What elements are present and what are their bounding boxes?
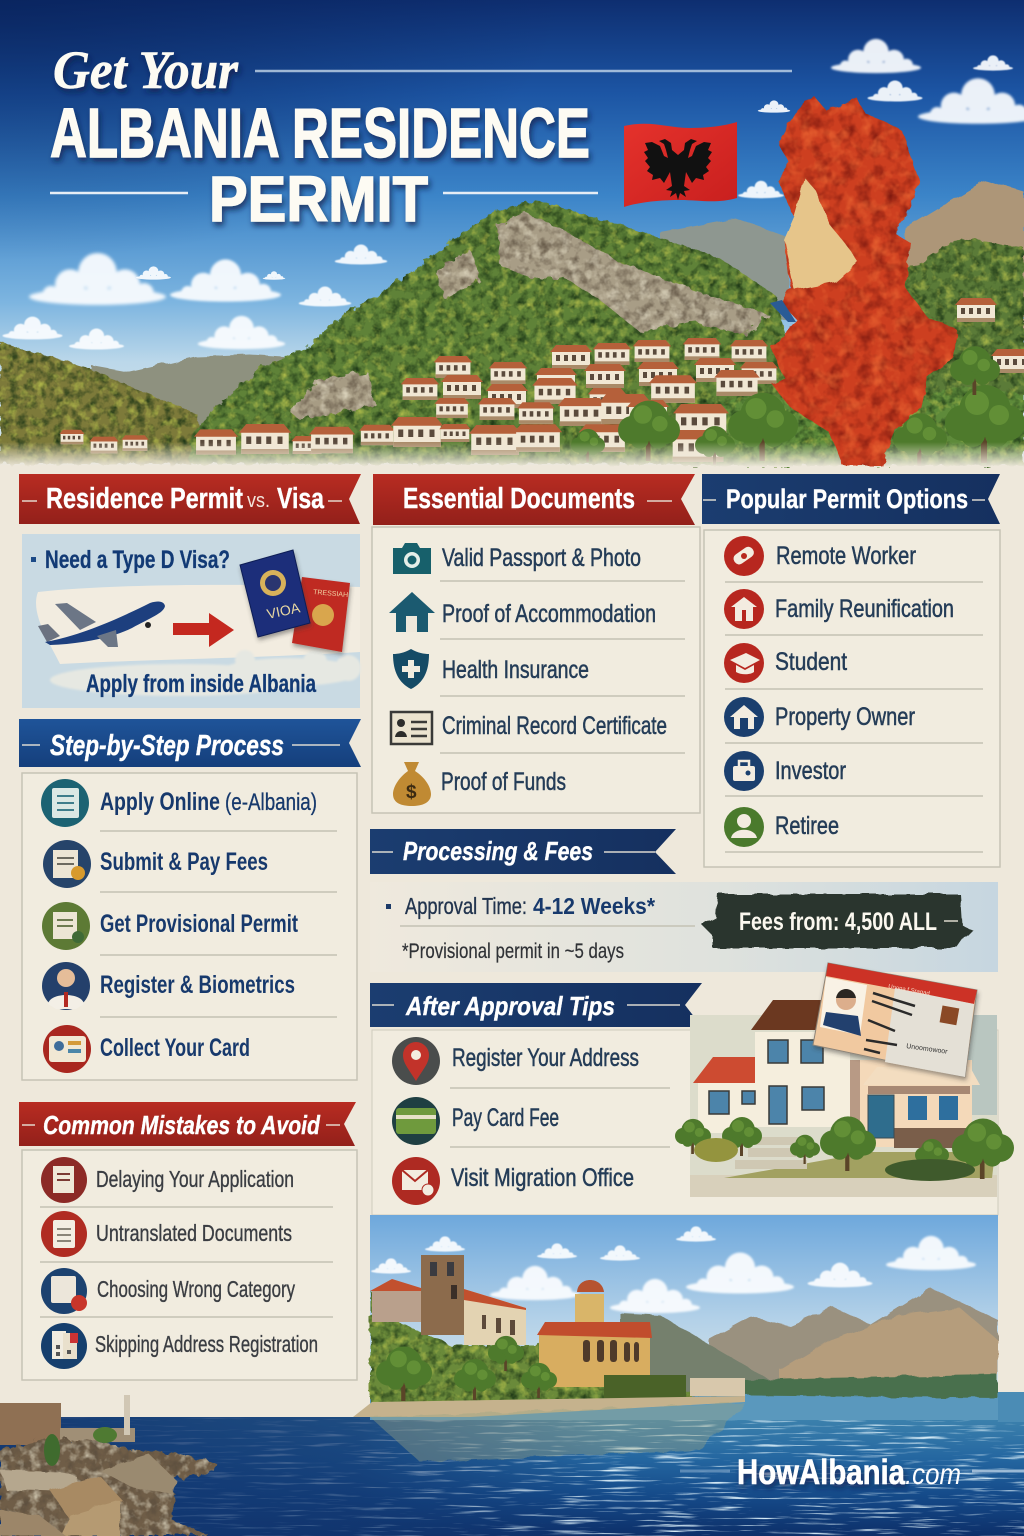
- banner: Essential Documents: Essential Documents: [403, 483, 635, 515]
- tip: migration office: Visit Migration Office: [451, 1164, 634, 1192]
- step: submit and pay: [43, 840, 268, 888]
- scenic coastal illustration: [353, 1215, 998, 1420]
- hero illustration: sky, mountains, hillside village: [0, 0, 1024, 467]
- step: register and biometrics: Register & Biometrics: [100, 971, 295, 999]
- mistake: skipping registration: [41, 1323, 318, 1369]
- residence card: [813, 963, 977, 1077]
- title: [50, 40, 792, 235]
- step: collect card: Collect Your Card: [100, 1034, 250, 1062]
- banner: Residence Permit vs. Visa: [19, 474, 361, 524]
- panel: popular permit options: [704, 530, 1000, 867]
- mistake: delaying: [41, 1157, 294, 1203]
- banner: Common Mistakes to Avoid: [19, 1102, 356, 1146]
- banner: Residence Permit vs. Visa: vs.: [247, 490, 270, 512]
- title line: Permit: PERMIT: [209, 163, 428, 235]
- icon: red arrow: [173, 613, 234, 647]
- fade to paper: [0, 442, 1024, 467]
- residence card: Unoomowoor: [906, 1043, 949, 1056]
- step: provisional permit: [42, 902, 298, 950]
- option: family reunification: [724, 589, 954, 629]
- banner: Residence Permit vs. Visa: Visa: [277, 483, 325, 515]
- clouds: [371, 1226, 976, 1313]
- banner: Step-by-Step Process: Step-by-Step Process: [50, 730, 284, 762]
- tip: migration office: [392, 1157, 634, 1205]
- hillside: [190, 200, 790, 464]
- icon: airplane: [38, 602, 165, 647]
- step: provisional permit: Get Provisional Permit: [100, 910, 298, 938]
- panel: process steps: [22, 773, 357, 1080]
- banner: Processing & Fees: Processing & Fees: [403, 836, 593, 866]
- mistake: untranslated: [41, 1211, 292, 1257]
- tip: register address: Register Your Address: [452, 1044, 639, 1072]
- banner: Residence Permit vs. Visa: Residence Permit: [46, 483, 243, 515]
- panel: processing and fees: [370, 882, 998, 972]
- banner: Essential Documents: [373, 474, 695, 525]
- banner: Step-by-Step Process: [19, 719, 361, 767]
- caption: Apply from inside Albania: [86, 670, 317, 698]
- document: accommodation: Proof of Accommodation: [442, 600, 656, 628]
- house main block: [693, 1000, 850, 1169]
- brand: HowAlbania.com: [680, 1453, 1024, 1492]
- option: remote worker: [724, 536, 916, 576]
- step: apply online: [41, 779, 317, 827]
- step: apply online: (e-Albania): [225, 789, 317, 816]
- hillside greenery: [370, 1290, 700, 1405]
- mistake: delaying: Delaying Your Application: [96, 1166, 294, 1192]
- document: proof of funds: [393, 762, 566, 806]
- option: property owner: Property Owner: [775, 703, 915, 731]
- step: submit and pay: Submit & Pay Fees: [100, 848, 268, 876]
- coastal fort and lighthouse: [0, 1395, 135, 1445]
- icon: double-headed eagle: [644, 139, 712, 200]
- distant mountains: [620, 1288, 998, 1398]
- title line: Albania Residence: ALBANIA RESIDENCE: [50, 94, 590, 172]
- banner: After Approval Tips: After Approval Tips: [405, 991, 615, 1021]
- panel: after approval tips: [372, 1030, 998, 1215]
- banner: Popular Permit Options: Popular Permit Options: [726, 484, 968, 514]
- option: investor: Investor: [775, 757, 846, 785]
- option: remote worker: Remote Worker: [776, 542, 916, 570]
- option: family reunification: Family Reunification: [775, 595, 954, 623]
- banner: Common Mistakes to Avoid: Common Mistakes to Avoid: [43, 1110, 321, 1140]
- rocks: [0, 1427, 218, 1536]
- panel: essential documents: [372, 527, 700, 813]
- village houses: [59, 298, 1024, 462]
- document: criminal record: [391, 712, 667, 744]
- option: investor: [724, 751, 846, 791]
- water right of the scenic panel: [998, 1392, 1024, 1422]
- water reflections: [370, 1403, 745, 1462]
- background mountains: [91, 180, 1024, 440]
- option: property owner: [724, 697, 915, 737]
- step: collect card: [43, 1025, 250, 1073]
- mistake: skipping registration: Skipping Address Registration: [95, 1331, 318, 1357]
- footnote: *Provisional permit in ~5 days: [402, 940, 624, 963]
- step: apply online: Apply Online: [100, 788, 220, 816]
- brand: HowAlbania.com: HowAlbania: [737, 1453, 905, 1492]
- clouds at the base of the visa panel: [50, 650, 361, 696]
- bushes and trees: [675, 1116, 1014, 1181]
- brand: HowAlbania.com: .com: [905, 1458, 961, 1491]
- panel: common mistakes: [22, 1150, 357, 1380]
- title line: Get Your: Get Your: [53, 40, 239, 100]
- domed yellow building: [537, 1280, 652, 1387]
- approval time: Approval Time:: [405, 893, 527, 919]
- fee badge: [702, 894, 973, 948]
- banner: Popular Permit Options: [702, 474, 1000, 524]
- clouds: [2, 39, 1024, 349]
- residence card: Unona f Sragad: [888, 984, 930, 997]
- banner: Processing & Fees: [370, 829, 676, 874]
- mistake: wrong category: [41, 1268, 295, 1314]
- rocky slope: [497, 212, 770, 335]
- step: register and biometrics: [42, 962, 295, 1010]
- document: proof of funds: Proof of Funds: [441, 768, 566, 796]
- approval time: 4-12 Weeks*: [533, 893, 655, 919]
- icon: blue passport: [240, 550, 310, 637]
- left building and tower: [370, 1255, 526, 1345]
- document: health insurance: Health Insurance: [442, 656, 589, 684]
- document: passport and photo: Valid Passport & Photo: [442, 544, 641, 572]
- document: accommodation: [389, 592, 656, 632]
- tip: pay card fee: Pay Card Fee: [452, 1104, 559, 1132]
- document: health insurance: [393, 649, 589, 689]
- illustration: house and residence card: [675, 963, 1014, 1197]
- mistake: wrong category: Choosing Wrong Category: [97, 1276, 295, 1302]
- option: student: [724, 643, 847, 683]
- mistake: untranslated: Untranslated Documents: [96, 1220, 292, 1246]
- sea: [0, 1417, 1024, 1536]
- map of Albania: [770, 95, 957, 466]
- icon: red passport: [292, 577, 350, 652]
- tip: pay card fee: [392, 1097, 559, 1145]
- Albanian flag: [624, 122, 737, 207]
- document: passport and photo: [393, 543, 641, 574]
- left green hill: [0, 342, 210, 464]
- right green hill: [900, 238, 1024, 465]
- option: retiree: Retiree: [775, 812, 839, 840]
- approval time: [405, 893, 655, 919]
- icon: blue passport: VIOA: [265, 599, 302, 622]
- subheading: Need a Type D Visa?: [45, 546, 230, 574]
- document: criminal record: Criminal Record Certificate: [442, 712, 667, 740]
- garden trees: [376, 1336, 745, 1401]
- quay: [353, 1396, 745, 1417]
- banner: After Approval Tips: [370, 983, 702, 1027]
- fee badge: Fees from: 4,500 ALL: [739, 908, 937, 936]
- house right wing: [840, 1060, 980, 1148]
- panel: visa: [22, 534, 361, 708]
- foreground greenery: [690, 385, 1024, 466]
- icon: red passport: TRESSIAH: [313, 589, 348, 599]
- tip: register address: [392, 1037, 639, 1085]
- trees: [571, 346, 1024, 466]
- option: retiree: [724, 807, 839, 847]
- option: student: Student: [775, 648, 847, 676]
- document: proof of funds: $: [406, 782, 417, 803]
